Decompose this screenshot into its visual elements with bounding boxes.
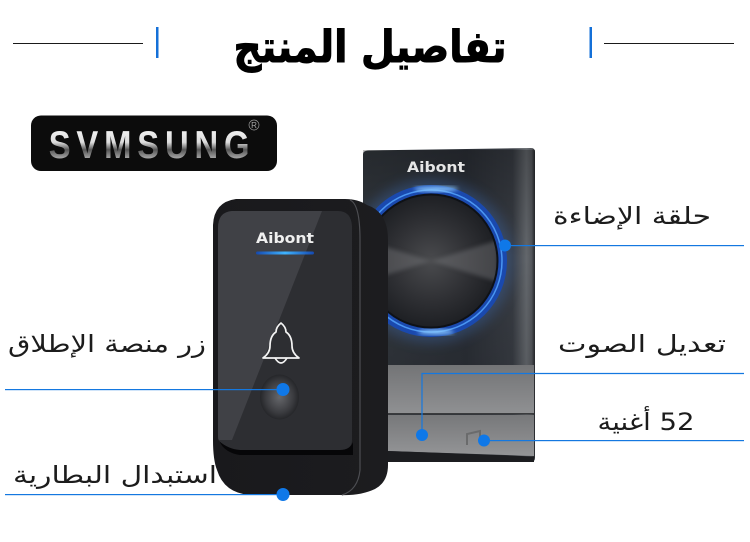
brand logo: SVMSUNG: [49, 122, 249, 167]
callout: volume: تعديل الصوت: [558, 330, 726, 358]
volume band: [388, 365, 534, 413]
doorbell brand: Aibont: [256, 231, 314, 247]
receiver body: [363, 148, 535, 462]
doorbell button unit: [213, 199, 388, 495]
icon: bell: [263, 323, 299, 363]
song band: [388, 415, 534, 456]
callout: songs: 52 أغنية: [598, 406, 694, 436]
title: تفاصيل المنتج: [234, 22, 506, 73]
callout: launch button: زر منصة الإطلاق: [8, 330, 206, 358]
callout: volume: [416, 330, 744, 441]
receiver unit: [349, 148, 535, 462]
press button: [260, 374, 299, 420]
title rule left: [13, 27, 158, 58]
brand logo: [31, 116, 277, 171]
callout: songs: [478, 406, 744, 446]
light ring: [349, 179, 513, 343]
callout: light ring: حلقة الإضاءة: [553, 202, 711, 230]
callout: light ring: [499, 202, 744, 252]
indicator bar: [256, 252, 314, 254]
title rule right: [590, 27, 734, 58]
callout: battery: [5, 461, 290, 501]
callout: battery: استبدال البطارية: [13, 461, 217, 489]
brand logo: R: [251, 121, 257, 130]
music note icon: [467, 431, 480, 445]
callout: launch button: [5, 330, 290, 396]
doorbell face: [218, 211, 352, 450]
receiver brand: Aibont: [407, 160, 465, 176]
doorbell body: [213, 199, 388, 495]
